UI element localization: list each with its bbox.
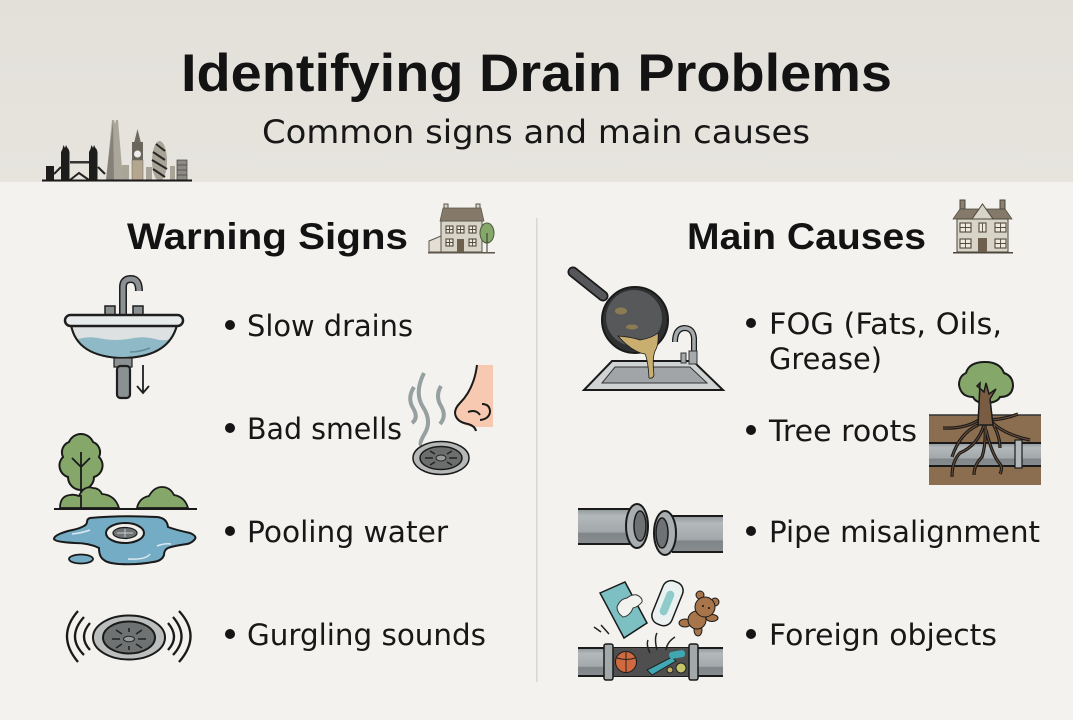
text: Bad smells: Bad smells <box>247 412 402 446</box>
text: Pipe misalignment: Pipe misalignment <box>769 515 1040 549</box>
icon: puddle with drain <box>54 516 195 564</box>
subtitle: Common signs and main causes <box>262 113 810 151</box>
heading: Main Causes: Main Causes <box>687 216 926 257</box>
icon: house right <box>953 200 1013 254</box>
text: FOG (Fats, Oils, Grease): Grease) <box>769 342 882 376</box>
icon: gurgling drain <box>67 611 190 662</box>
heading: Warning Signs: Warning Signs <box>127 216 408 257</box>
title: Identifying Drain Problems <box>181 44 892 103</box>
text: Foreign objects: Foreign objects <box>769 618 997 652</box>
icon: tree and bushes <box>54 434 197 510</box>
icon: London skyline <box>42 120 192 182</box>
icon: misaligned pipes <box>578 504 723 555</box>
header band <box>0 0 1073 182</box>
text: Gurgling sounds: Gurgling sounds <box>247 618 486 652</box>
text: FOG (Fats, Oils, Grease) <box>746 307 1002 376</box>
icon: foreign objects in pipe <box>578 578 723 680</box>
text: Pooling water: Pooling water <box>247 515 448 549</box>
text: Tree roots: Tree roots <box>768 414 917 448</box>
icon: nose and smelly drain <box>410 365 493 474</box>
text: Slow drains: Slow drains <box>247 309 413 343</box>
icon: pan pouring grease into sink <box>573 272 723 390</box>
icon: sink <box>65 279 183 398</box>
text: FOG (Fats, Oils, Grease): FOG (Fats, Oils, <box>769 307 1002 341</box>
icon: tree roots through pipe <box>929 362 1041 485</box>
icon: house left <box>428 204 495 254</box>
divider <box>536 218 538 682</box>
